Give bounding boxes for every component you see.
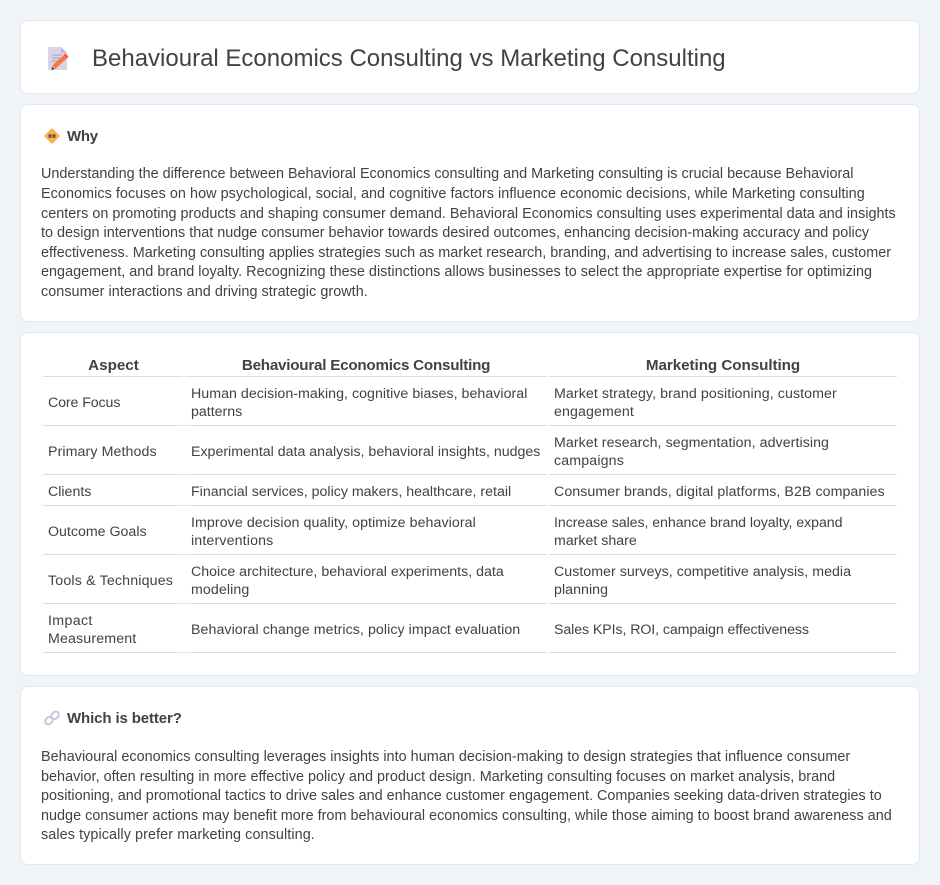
row: clients: Consumer brands, digital platforms, B2B companies: [554, 484, 885, 500]
row: core focus: engagement: [554, 404, 634, 420]
icon: diamond sign: [44, 128, 60, 144]
row: core focus: Market strategy, brand positioning, customer: [554, 386, 837, 402]
panel: why: [20, 104, 920, 322]
table header: [88, 357, 800, 374]
row: outcome goals: market share: [554, 533, 637, 549]
table header: Behavioural Economics Consulting: [242, 357, 490, 374]
row: impact measurement: Impact: [48, 613, 93, 629]
panel: which is better: [20, 686, 920, 865]
row: outcome goals: Increase sales, enhance brand loyalty, expand: [554, 515, 842, 531]
row: outcome goals: [48, 515, 842, 549]
text block: which is better paragraph: positioning, and promotional tactics to drive sales and enhance customer engagement. Companies seeking data-driven strategies to: [41, 788, 882, 804]
table header: Marketing Consulting: [646, 357, 800, 374]
text block: why paragraph: consumer interactions and driving strategic growth.: [41, 284, 368, 300]
row: clients: Clients: [48, 484, 91, 500]
text block: why paragraph: to design interventions that nudge consumer behavior towards desired outcomes, enhancing decision-making accuracy and policy: [41, 225, 869, 241]
table header: Aspect: [88, 357, 139, 374]
panel: comparison table: [20, 332, 920, 676]
row: clients: Financial services, policy makers, healthcare, retail: [191, 484, 511, 500]
heading: which is better: Which is better?: [67, 710, 182, 727]
text block: which is better paragraph: nudge consumer actions may benefit more from behavioural economics consulting, while those aiming to boost brand awareness and: [41, 808, 892, 824]
row: clients: [48, 484, 885, 500]
title: Behavioural Economics Consulting vs Marketing Consulting: [92, 45, 726, 72]
row: core focus: Core Focus: [48, 395, 120, 411]
text block: why paragraph: [41, 166, 896, 300]
icon: document with pencil: [48, 47, 68, 70]
row: primary methods: Primary Methods: [48, 444, 157, 460]
panel: title header: [20, 20, 920, 94]
row: impact measurement: Sales KPIs, ROI, campaign effectiveness: [554, 622, 809, 638]
row: outcome goals: interventions: [191, 533, 273, 549]
row: tools and techniques: [48, 564, 851, 598]
icon: link: [44, 710, 60, 726]
text block: which is better paragraph: behavior, often resulting in more effective policy and product design. Marketing consulting focuses on market analysis, brand: [41, 769, 835, 785]
row: tools and techniques: planning: [554, 582, 608, 598]
row: outcome goals: Outcome Goals: [48, 524, 147, 540]
text block: why paragraph: engagement, and brand loyalty. Recognizing these distinctions allows businesses to select the appropriate expertise for optimizing: [41, 264, 872, 280]
row: tools and techniques: Tools & Techniques: [48, 573, 173, 589]
row: outcome goals: Improve decision quality, optimize behavioral: [191, 515, 476, 531]
row: core focus: Human decision-making, cognitive biases, behavioral: [191, 386, 527, 402]
row: impact measurement: Measurement: [48, 631, 136, 647]
row: tools and techniques: Customer surveys, competitive analysis, media: [554, 564, 851, 580]
text block: why paragraph: effectiveness. Marketing consulting applies strategies such as market research, branding, and advertising to increase sales, customer: [41, 245, 891, 261]
row: primary methods: Experimental data analysis, behavioral insights, nudges: [191, 444, 540, 460]
text block: which is better paragraph: sales typically prefer marketing consulting.: [41, 827, 315, 843]
row: primary methods: Market research, segmentation, advertising: [554, 435, 829, 451]
row: impact measurement: Behavioral change metrics, policy impact evaluation: [191, 622, 520, 638]
text block: why paragraph: centers on promoting products and shaping consumer demand. Behavioral Economics consulting uses experimental data and insights: [41, 206, 896, 222]
row: impact measurement: [48, 613, 809, 647]
row: primary methods: [48, 435, 829, 469]
text block: which is better paragraph: [41, 749, 892, 843]
heading: why: Why: [67, 128, 98, 145]
row: primary methods: campaigns: [554, 453, 624, 469]
row: core focus: [48, 386, 837, 420]
row: tools and techniques: Choice architecture, behavioral experiments, data: [191, 564, 504, 580]
text block: why paragraph: Economics focuses on how psychological, social, and cognitive factors influence economic decisions, while Marketing consulting: [41, 186, 865, 202]
text block: why paragraph: Understanding the difference between Behavioral Economics consulting and Marketing consulting is crucial because Behavioral: [41, 166, 853, 182]
row: core focus: patterns: [191, 404, 242, 420]
row: tools and techniques: modeling: [191, 582, 249, 598]
text block: which is better paragraph: Behavioural economics consulting leverages insights into human decision-making to design strategies that influence consumer: [41, 749, 850, 765]
